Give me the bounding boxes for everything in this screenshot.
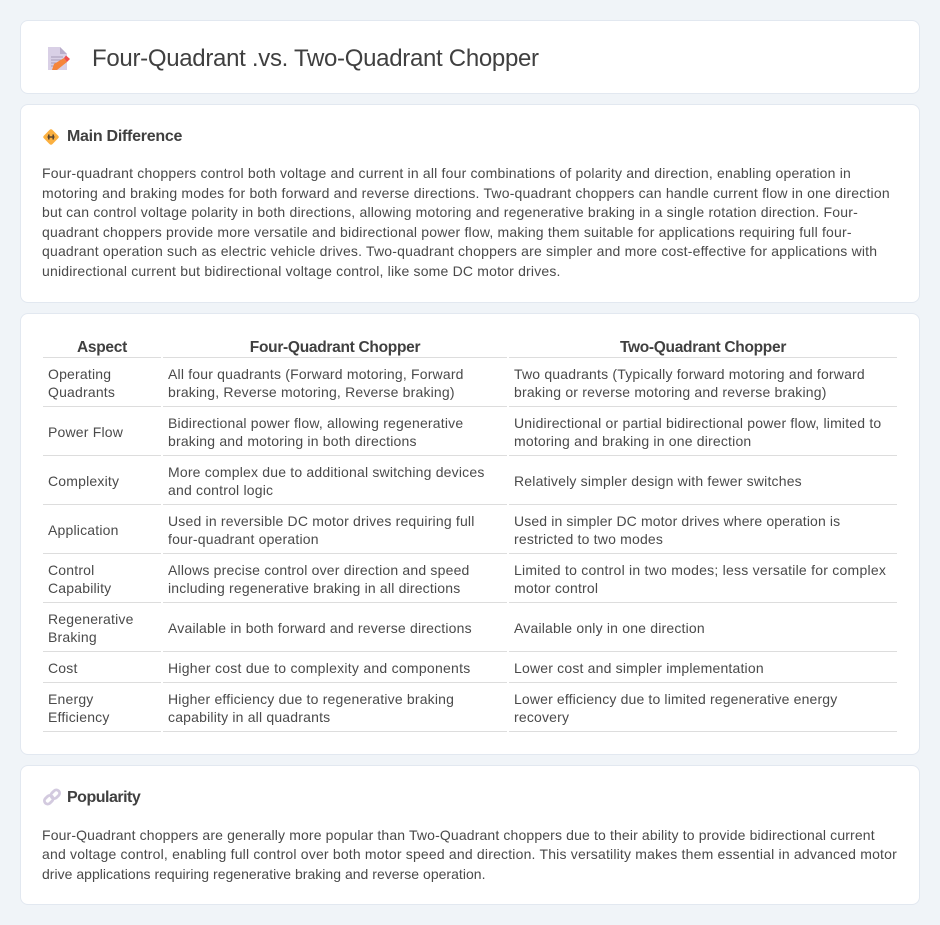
- text block: popularity: drive applications requiring regenerative braking and reverse operation.: [42, 866, 485, 882]
- table row: operating quadrants: All four quadrants (Forward motoring, Forward: [168, 366, 464, 382]
- table row: power flow: [48, 415, 881, 449]
- text block: popularity: and voltage control, enabling full control over both motor speed and direction. This versatility makes them essential in advanced motor: [42, 846, 897, 862]
- table header: Four-Quadrant Chopper: [250, 339, 420, 356]
- table header: Aspect: [77, 339, 127, 356]
- table row: energy efficiency: Energy: [48, 691, 94, 707]
- table row: operating quadrants: [48, 366, 865, 400]
- table row: control capability: including regenerative braking in all directions: [168, 580, 460, 596]
- table row: complexity: Complexity: [48, 473, 119, 489]
- table row: operating quadrants: Quadrants: [48, 384, 115, 400]
- table row: energy efficiency: capability in all quadrants: [168, 709, 330, 725]
- text block: main difference: [42, 165, 890, 279]
- table row: operating quadrants: braking or reverse motoring and reverse braking): [514, 384, 827, 400]
- table row: application: Application: [48, 522, 119, 538]
- table row: energy efficiency: Efficiency: [48, 709, 110, 725]
- table header: Two-Quadrant Chopper: [620, 339, 786, 356]
- table row: control capability: Capability: [48, 580, 111, 596]
- table row: control capability: Control: [48, 562, 94, 578]
- text block: main difference: quadrant choppers provide more versatile and bidirectional power flow, making them suitable for applications requiring full four-: [42, 224, 852, 240]
- table row: complexity: More complex due to additional switching devices: [168, 464, 485, 480]
- table row: energy efficiency: Higher efficiency due to regenerative braking: [168, 691, 454, 707]
- table row: power flow: Power Flow: [48, 424, 123, 440]
- table row: cost: [48, 660, 764, 676]
- table row: control capability: Limited to control in two modes; less versatile for complex: [514, 562, 886, 578]
- table row: power flow: Unidirectional or partial bidirectional power flow, limited to: [514, 415, 881, 431]
- text block: main difference: unidirectional current but bidirectional voltage control, like some DC motor drives.: [42, 263, 561, 279]
- panel: popularity: [20, 765, 920, 905]
- table row: cost: Higher cost due to complexity and components: [168, 660, 470, 676]
- panel: main difference: [20, 104, 920, 303]
- icon: document with pencil: [48, 47, 70, 70]
- table row: application: four-quadrant operation: [168, 531, 319, 547]
- table header: [77, 339, 786, 356]
- table row: regenerative braking: [48, 611, 705, 645]
- table row: regenerative braking: Regenerative: [48, 611, 134, 627]
- icon: link: [43, 788, 61, 806]
- heading: popularity: Popularity: [67, 789, 140, 806]
- table row: operating quadrants: braking, Reverse motoring, Reverse braking): [168, 384, 455, 400]
- text block: main difference: motoring and braking modes for both forward and reverse directions. Two-quadrant choppers can handle current flow in one direction: [42, 185, 890, 201]
- table row: power flow: motoring and braking in one direction: [514, 433, 751, 449]
- table row: cost: Cost: [48, 660, 78, 676]
- table row: application: [48, 513, 840, 547]
- text block: main difference: but can control voltage polarity in both directions, allowing motoring and regenerative braking in a single rotation direction. Four-: [42, 204, 858, 220]
- panel: comparison table: [20, 313, 920, 755]
- table row: operating quadrants: Operating: [48, 366, 111, 382]
- table row: application: Used in simpler DC motor drives where operation is: [514, 513, 840, 529]
- table row: regenerative braking: Braking: [48, 629, 97, 645]
- table row: regenerative braking: Available only in one direction: [514, 620, 705, 636]
- table row: complexity: [48, 464, 802, 498]
- table row: energy efficiency: [48, 691, 838, 725]
- panel: header: [20, 20, 920, 94]
- table row: power flow: braking and motoring in both directions: [168, 433, 417, 449]
- table row: complexity: Relatively simpler design with fewer switches: [514, 473, 802, 489]
- table row: energy efficiency: Lower efficiency due to limited regenerative energy: [514, 691, 837, 707]
- text block: popularity: [42, 827, 897, 882]
- table row: control capability: [48, 562, 886, 596]
- text block: popularity: Four-Quadrant choppers are generally more popular than Two-Quadrant choppers due to their ability to provide bidirectional current: [42, 827, 875, 843]
- table row: power flow: Bidirectional power flow, allowing regenerative: [168, 415, 463, 431]
- table row: regenerative braking: Available in both forward and reverse directions: [168, 620, 472, 636]
- icon: warning diamond: [43, 129, 59, 145]
- table row: application: restricted to two modes: [514, 531, 663, 547]
- heading: main difference: Main Difference: [67, 128, 182, 145]
- table row: control capability: Allows precise control over direction and speed: [168, 562, 470, 578]
- title: Four-Quadrant .vs. Two-Quadrant Chopper: [92, 45, 539, 72]
- text block: main difference: quadrant operation such as electric vehicle drives. Two-quadrant choppers are simpler and more cost-effective for applications with: [42, 243, 877, 259]
- text block: main difference: Four-quadrant choppers control both voltage and current in all four combinations of polarity and direction, enabling operation in: [42, 165, 851, 181]
- table row: cost: Lower cost and simpler implementation: [514, 660, 764, 676]
- table row: control capability: motor control: [514, 580, 598, 596]
- table row: application: Used in reversible DC motor drives requiring full: [168, 513, 475, 529]
- table row: energy efficiency: recovery: [514, 709, 569, 725]
- table row: operating quadrants: Two quadrants (Typically forward motoring and forward: [514, 366, 865, 382]
- table row: complexity: and control logic: [168, 482, 273, 498]
